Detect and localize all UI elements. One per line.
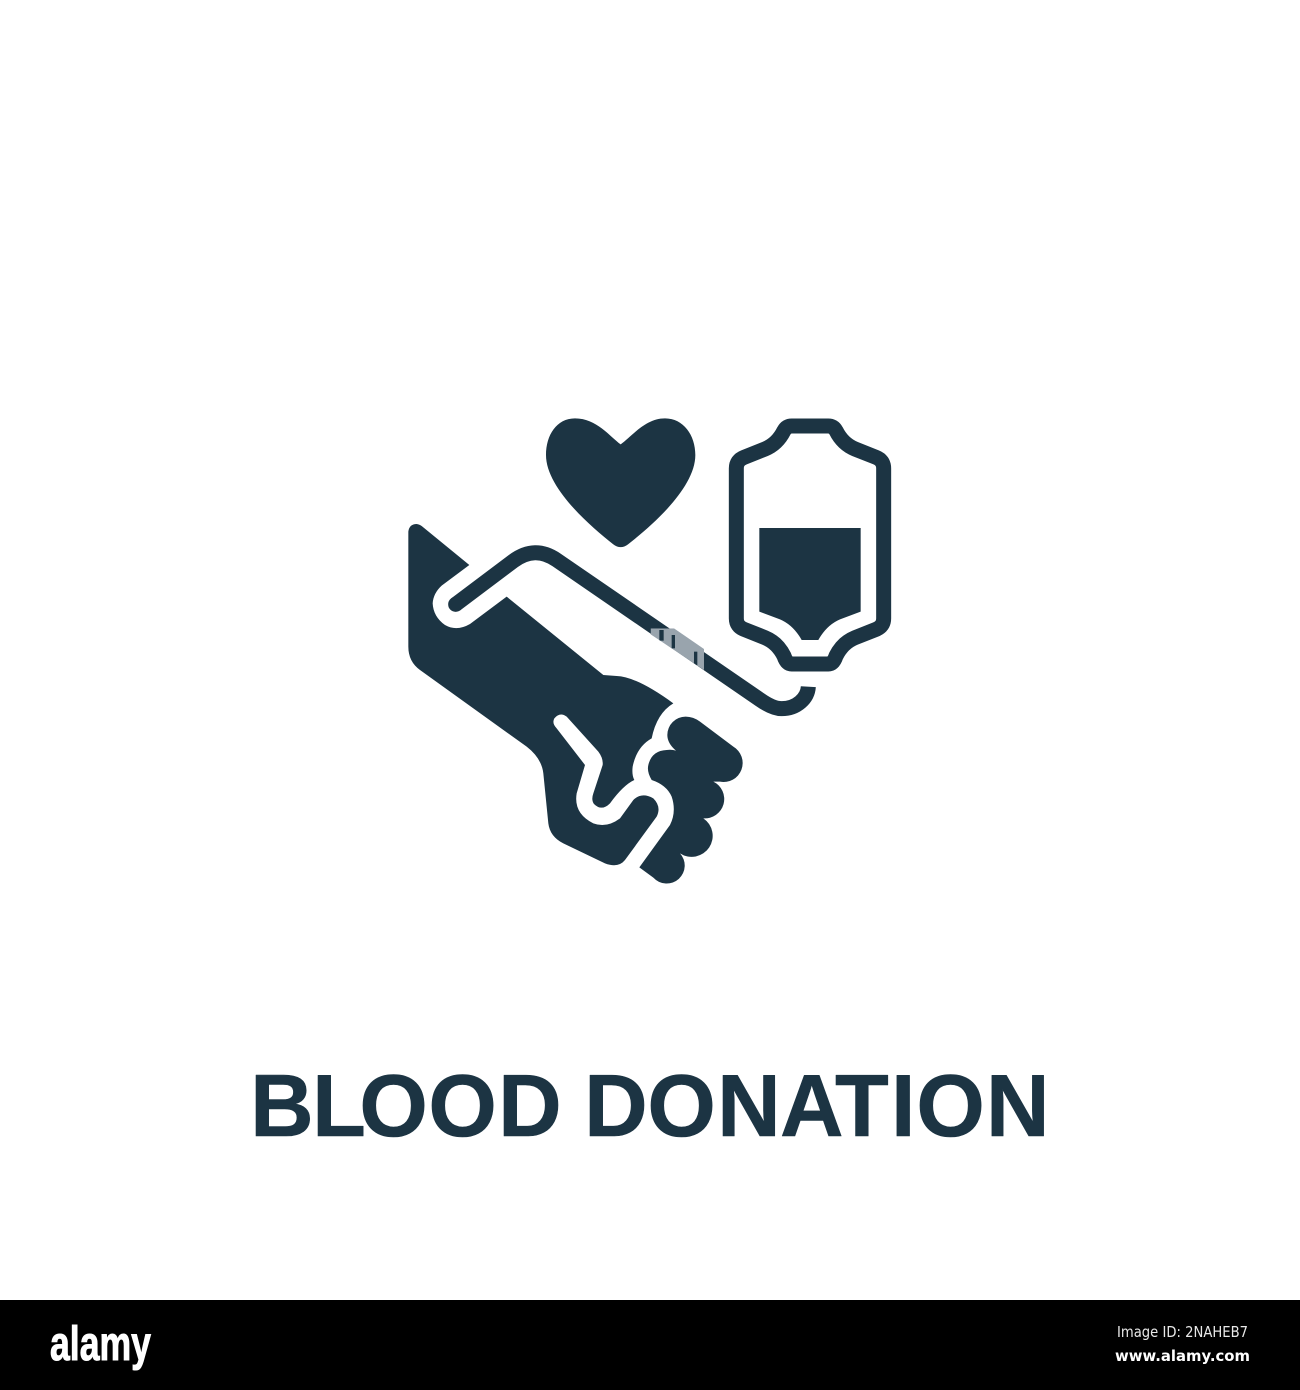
website: www.alamy.com bbox=[1115, 1347, 1250, 1365]
blood bag outline bbox=[736, 426, 884, 664]
icon: transfusion tube bbox=[448, 553, 808, 709]
icon: fist bbox=[639, 717, 743, 884]
footer bar bbox=[0, 1300, 1300, 1390]
logo: alamy: alamy bbox=[50, 1318, 151, 1371]
icon: heart bbox=[546, 418, 695, 547]
icon: arm bbox=[408, 524, 673, 865]
icon: blood bag bbox=[736, 426, 884, 664]
image id: Image ID: 2NAHEB7 bbox=[1117, 1323, 1248, 1341]
tube rounded end bbox=[448, 597, 463, 612]
watermark on tube bbox=[650, 628, 704, 670]
icon: blood donation bbox=[408, 418, 884, 884]
blood level bbox=[759, 528, 861, 640]
tube line bbox=[456, 553, 808, 709]
title: BLOOD DONATION bbox=[250, 1056, 1050, 1155]
